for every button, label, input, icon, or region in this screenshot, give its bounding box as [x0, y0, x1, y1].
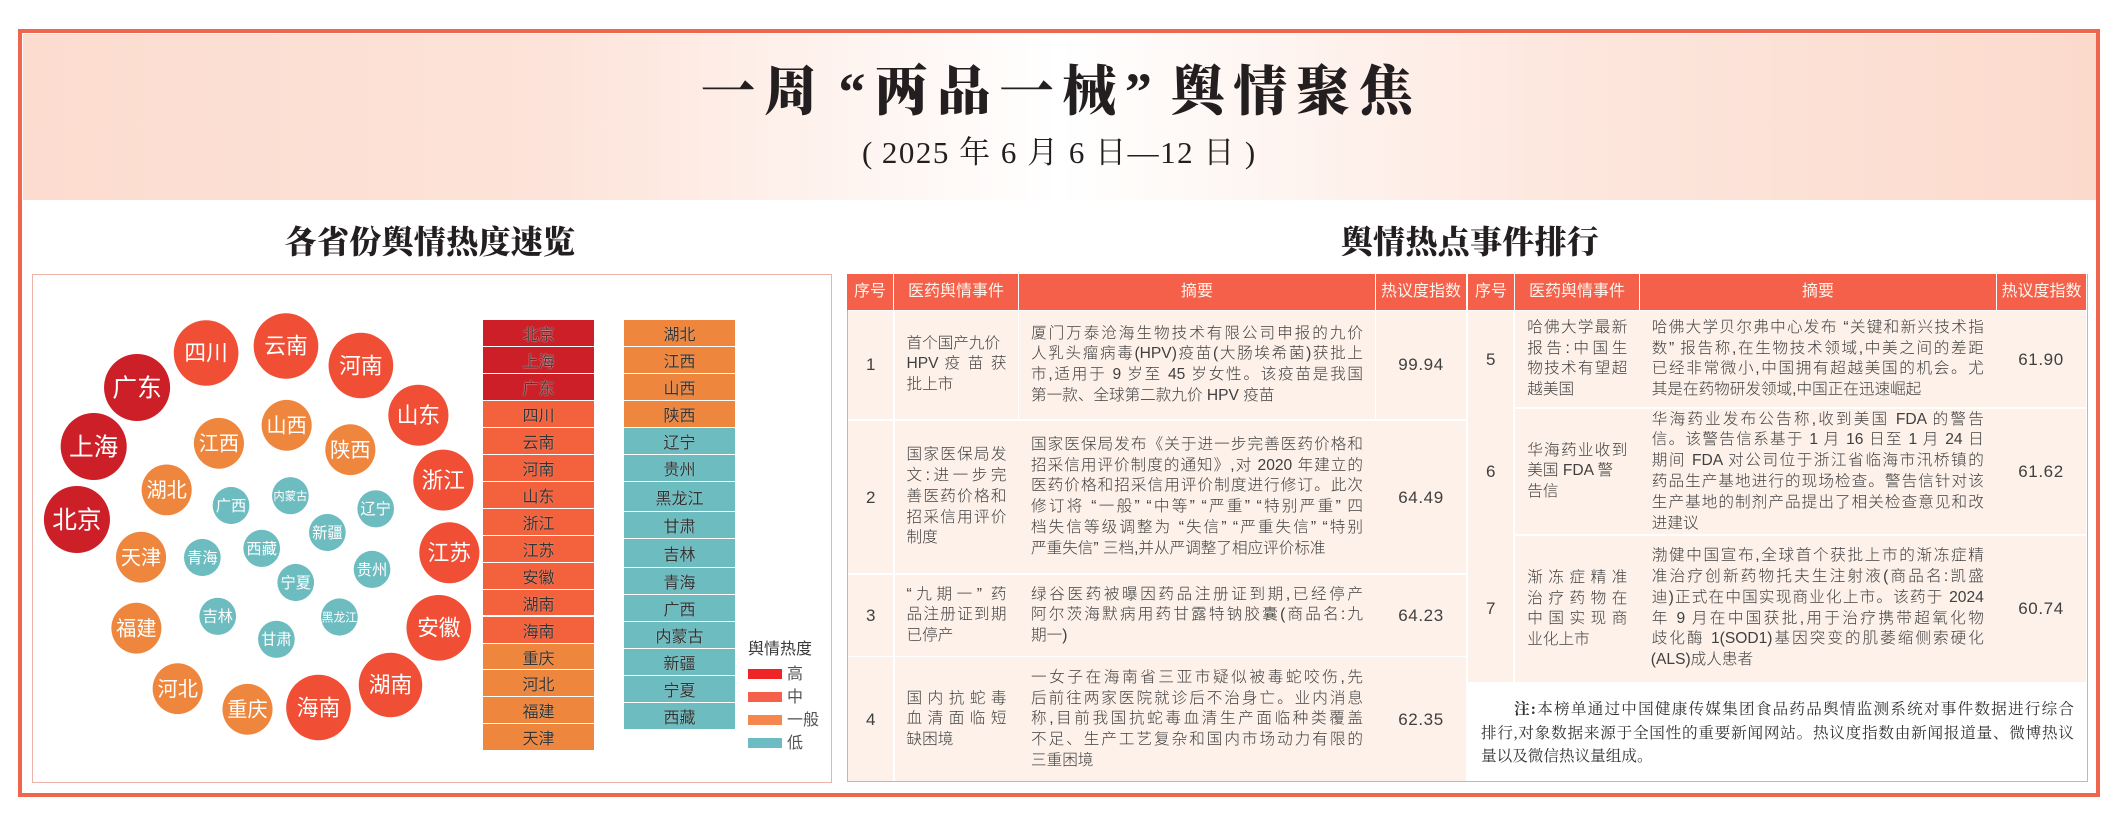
row 2: event: 制度	[906, 529, 938, 546]
row 6: event: 美国 FDA 警	[1527, 462, 1613, 479]
legend: 中	[787, 689, 803, 706]
bubble: 北京	[44, 486, 110, 553]
row 7: summary: 年 9 月在中国获批,用于治疗携带超氧化物	[1652, 610, 1984, 627]
bubble: 海南	[286, 675, 351, 740]
bubble: 山西: 山西	[266, 414, 307, 438]
bubble: 云南: 云南	[264, 333, 308, 359]
row 2: summary: 档失信等级调整为 “失信” “严重失信” “特别	[1031, 519, 1363, 536]
footnote: 注:本榜单通过中国健康传媒集团食品药品舆情监测系统对事件数据进行综合	[1514, 701, 2074, 718]
bubble: 四川	[174, 320, 238, 386]
row 4: summary: 后前往两家医院就诊后不治身亡。业内消息	[1031, 690, 1363, 707]
table header: left: 医药舆情事件	[908, 283, 1004, 300]
row 2: event: 国家医保局发	[906, 446, 1006, 463]
row 7: summary: 迪)正式在中国实现商业化上市。该药于 2024	[1652, 589, 1984, 606]
row 2: summary: 国家医保局发布《关于进一步完善医药价格和	[1031, 436, 1363, 453]
bubble: 黑龙江: 黑龙江	[322, 610, 357, 624]
bubble: 天津	[116, 532, 166, 583]
footnote	[1481, 700, 2074, 765]
bubble: 重庆	[222, 684, 273, 735]
row 5: event: 报告:中国生	[1527, 340, 1627, 357]
row 1: summary: 第一款、全球第二款九价 HPV 疫苗	[1031, 387, 1274, 404]
row 7: event: 渐冻症精准	[1527, 569, 1627, 586]
bubble: 内蒙古	[272, 477, 309, 514]
table header: left: 摘要	[1181, 283, 1213, 300]
row 3: score: 64.23	[1398, 606, 1444, 625]
bubble: 内蒙古: 内蒙古	[273, 489, 307, 503]
legend: 一般	[787, 712, 819, 729]
row 7: summary: 歧化酶 1(SOD1)基因突变的肌萎缩侧索硬化	[1652, 630, 1984, 647]
row 2: summary: 严重失信” 三档,并从严调整了相应评价标准	[1031, 540, 1326, 557]
table header: right: 序号	[1475, 283, 1507, 300]
row 5: event	[1527, 318, 1627, 398]
bubble: 辽宁	[357, 490, 394, 527]
row 7: event: 治疗药物在	[1527, 590, 1627, 607]
province list: column 1: 云南	[522, 435, 554, 452]
province list: column 1	[483, 320, 594, 750]
bubble chart: provinces	[44, 313, 480, 740]
row 6: number: 6	[1486, 462, 1496, 481]
province list: column 2: 新疆	[663, 656, 696, 673]
row 4: score: 62.35	[1398, 710, 1444, 729]
table header: left: 序号	[854, 283, 886, 300]
row 1: summary	[1031, 324, 1363, 404]
row 6: summary	[1652, 410, 1984, 532]
row 2: event: 招采信用评价	[906, 509, 1006, 526]
province list: column 2: 宁夏	[663, 683, 696, 700]
row 4: summary	[1031, 668, 1363, 769]
province list: column 2: 湖北	[663, 327, 696, 344]
row 5: summary: 哈佛大学贝尔弗中心发布 “关键和新兴技术指	[1652, 319, 1984, 336]
bubble: 贵州	[354, 551, 390, 588]
province list: column 1: 四川	[522, 408, 554, 425]
province list: column 1: 江苏	[522, 543, 554, 560]
bubble: 广西	[213, 487, 249, 524]
row 4: summary: 一女子在海南省三亚市疑似被毒蛇咬伤,先	[1031, 669, 1363, 686]
bubble: 陕西: 陕西	[330, 439, 371, 462]
row 2: summary	[1031, 436, 1363, 557]
province list: column 1: 上海	[522, 354, 554, 371]
row 1: summary: 市,适用于 9 岁至 45 岁女性。该疫苗是我国	[1031, 366, 1363, 383]
row 6: summary: 期间 FDA 对公司位于浙江省临海市汛桥镇的	[1652, 452, 1984, 469]
bubble: 云南	[254, 313, 318, 379]
bubble: 四川: 四川	[184, 340, 228, 366]
province list: column 2: 广西	[663, 602, 696, 619]
panel: ranking table frame	[847, 274, 2088, 782]
row 2: summary: 修订将 “一般” “中等” “严重” “特别严重” 四	[1031, 498, 1363, 515]
row 2: score: 64.49	[1398, 488, 1444, 506]
bubble: 广东: 广东	[112, 374, 162, 403]
row 5: event: 物技术有望超	[1527, 360, 1627, 377]
row 6: score: 61.62	[2018, 462, 2064, 481]
bubble: 江苏	[419, 522, 479, 583]
bubble: 重庆: 重庆	[227, 698, 268, 722]
province list: column 1: 河南	[522, 462, 554, 479]
row 6: summary: 药品生产基地进行的现场检查。警告信针对该	[1652, 473, 1984, 490]
table header: right: 医药舆情事件	[1529, 283, 1625, 300]
bubble: 湖南: 湖南	[369, 672, 412, 698]
row 7: summary: 准治疗创新药物托夫生注射液(商品名:凯盛	[1652, 568, 1984, 585]
row 7: event: 业化上市	[1527, 631, 1590, 648]
bubble: 江苏: 江苏	[428, 540, 471, 566]
table header: left	[847, 274, 1465, 310]
row 5: event: 哈佛大学最新	[1527, 319, 1627, 336]
bubble: 福建: 福建	[116, 617, 157, 641]
row 3: event: 已停产	[906, 627, 953, 644]
row 3: event: 品注册证到期	[906, 606, 1006, 623]
row 6: summary: 华海药业发布公告称,收到美国 FDA 的警告	[1652, 411, 1984, 428]
table header: left: 热议度指数	[1381, 283, 1461, 300]
row 4: event: 缺困境	[906, 731, 953, 748]
row 2: summary: 招采信用评价制度的通知》,对 2020 年建立的	[1031, 457, 1363, 474]
row 7: event	[1527, 568, 1627, 648]
bubble: 新疆	[309, 514, 346, 551]
row 5: summary	[1652, 318, 1984, 398]
row 1: event	[906, 335, 1006, 393]
province list: column 1: 河北	[522, 677, 554, 694]
row 1: event: HPV 疫 苗 获	[906, 355, 1006, 372]
row 3: summary: 绿谷医药被曝因药品注册证到期,已经停产	[1031, 586, 1363, 603]
province list: column 1: 山东	[522, 489, 554, 506]
bubble: 西藏: 西藏	[246, 540, 277, 558]
row 3: summary: 期一)	[1031, 627, 1067, 644]
table header: right	[1468, 274, 2086, 310]
bubble: 吉林	[199, 598, 236, 635]
bubble: 河北: 河北	[157, 678, 198, 701]
bubble: 天津: 天津	[121, 546, 161, 570]
row 1: summary: 厦门万泰沧海生物技术有限公司申报的九价	[1031, 325, 1363, 342]
province list: column 2: 甘肃	[663, 519, 696, 536]
row 5: summary: 其是在药物研发领域,中国正在迅速崛起	[1652, 381, 1921, 398]
row 1: event: 批上市	[906, 376, 953, 393]
table body backgrounds: left	[848, 311, 1466, 781]
row 7: number: 7	[1486, 599, 1496, 618]
row 4: event	[906, 690, 1006, 748]
bubble: 浙江: 浙江	[422, 468, 465, 493]
row 5: summary: 已经非常微小,中国拥有超越美国的机会。尤	[1652, 360, 1984, 377]
row 6: event	[1527, 442, 1627, 500]
bubble: 贵州: 贵州	[357, 561, 387, 579]
row 1: score: 99.94	[1398, 355, 1444, 374]
row 7: summary: 渤健中国宣布,全球首个获批上市的渐冻症精	[1652, 547, 1984, 564]
row 7: event: 中国实现商	[1527, 610, 1627, 627]
row 3: event: “九期一” 药	[906, 586, 1006, 603]
bubble: 陕西	[325, 424, 375, 475]
bubble: 青海: 青海	[187, 549, 218, 567]
bubble: 山西	[262, 400, 312, 451]
province list: column 1: 安徽	[522, 570, 554, 587]
row 6: summary: 进建议	[1652, 515, 1699, 532]
province list: column 1: 湖南	[522, 596, 554, 614]
row 7: summary: (ALS)成人患者	[1651, 651, 1753, 668]
legend: 低	[787, 735, 803, 752]
bubble: 北京: 北京	[52, 506, 102, 535]
row 3: summary: 阿尔茨海默病用药甘露特钠胶囊(商品名:九	[1031, 606, 1363, 623]
row 5: number: 5	[1486, 350, 1496, 368]
province list: column 2: 山西	[663, 381, 696, 398]
row 4: summary: 不足、生产工艺复杂和国内市场动力有限的	[1031, 731, 1363, 748]
bubble: 辽宁: 辽宁	[360, 500, 391, 518]
province list: column 2	[624, 320, 735, 729]
bubble: 湖南	[359, 653, 422, 717]
bubble: 宁夏: 宁夏	[280, 574, 311, 592]
row 5: event: 越美国	[1527, 381, 1574, 398]
legend: 舆情热度	[748, 641, 812, 658]
row 3: event	[906, 586, 1006, 644]
bubble: 河南	[329, 333, 393, 398]
province list: column 2: 西藏	[663, 710, 696, 727]
table header: right: 摘要	[1802, 283, 1834, 300]
panel: province heat	[32, 274, 832, 783]
bubble: 河北	[153, 663, 203, 714]
province list: column 2: 黑龙江	[655, 490, 704, 508]
row 6: summary: 信。该警告信系基于 1 月 16 日至 1 月 24 日	[1652, 431, 1984, 448]
row 1: number: 1	[866, 355, 876, 374]
row 4: event: 国内抗蛇毒	[906, 690, 1006, 707]
bubble: 黑龙江	[321, 598, 358, 636]
province list: column 1: 福建	[522, 704, 554, 721]
row 2: summary: 医药价格和招采信用评价制度进行修订。此次	[1031, 477, 1363, 494]
row 2: event	[906, 446, 1006, 546]
bubble: 甘肃	[258, 621, 295, 658]
bubble: 宁夏	[277, 564, 314, 601]
date range: ( 2025 年 6 月 6 日—12 日 )	[862, 135, 1257, 170]
province list: column 1: 海南	[522, 624, 554, 641]
bubble: 安徽: 安徽	[417, 615, 461, 641]
bubble: 山东: 山东	[397, 403, 440, 428]
bubble: 山东	[388, 385, 448, 446]
province list: column 2: 陕西	[663, 408, 696, 425]
row 2: number: 2	[866, 488, 876, 506]
bubble: 广东	[104, 354, 170, 421]
row 4: number: 4	[866, 710, 876, 729]
legend	[748, 640, 819, 752]
province list: column 1: 北京	[522, 327, 554, 344]
row 1: summary: 人乳头瘤病毒(HPV)疫苗(大肠埃希菌)获批上	[1031, 345, 1363, 362]
province list: column 2: 贵州	[663, 462, 696, 479]
bubble: 吉林: 吉林	[202, 608, 233, 626]
bubble: 河南: 河南	[339, 353, 383, 379]
footnote: 排行,对象数据来源于全国性的重要新闻网站。热议度指数由新闻报道量、微博热议	[1481, 724, 2074, 742]
bubble: 新疆: 新疆	[312, 524, 343, 542]
row 2: event: 善医药价格和	[906, 488, 1006, 505]
bubble: 西藏	[243, 530, 280, 567]
row 7: score: 60.74	[2018, 599, 2064, 618]
heading: province heat overview: 各省份舆情热度速览	[285, 224, 575, 260]
row 3: number: 3	[866, 606, 876, 625]
heading: hot event ranking: 舆情热点事件排行	[1341, 224, 1599, 260]
footnote: 量以及微信热议量组成。	[1481, 748, 1653, 765]
bubble: 湖北	[142, 464, 192, 515]
bubble: 上海: 上海	[69, 433, 118, 462]
legend: 高	[787, 666, 803, 683]
row 5: score: 61.90	[2018, 350, 2064, 368]
bubble: 湖北: 湖北	[146, 479, 187, 502]
bubble: 青海	[184, 539, 221, 576]
row 7: summary	[1651, 546, 1984, 668]
table header: right: 热议度指数	[2001, 283, 2082, 300]
row 6: event: 华海药业收到	[1527, 442, 1627, 459]
bubble: 福建	[111, 603, 161, 654]
title: 一周“两品一械”舆情聚焦	[701, 62, 1421, 122]
province list: column 2: 辽宁	[663, 435, 696, 452]
province list: column 1: 天津	[522, 731, 554, 748]
province list: column 2: 江西	[663, 354, 696, 371]
bubble: 江西: 江西	[199, 432, 239, 456]
province list: column 2: 青海	[663, 575, 696, 592]
row 3: summary	[1031, 586, 1363, 644]
province list: column 1: 浙江	[522, 516, 554, 533]
row 5: summary: 数” 报告称,在生物技术领域,中美之间的差距	[1652, 340, 1984, 357]
bubble: 海南: 海南	[297, 695, 340, 721]
bubble: 浙江	[413, 450, 473, 511]
row 6: summary: 生产基地的制剂产品提出了相关检查意见和改	[1652, 494, 1984, 511]
row 4: summary: 称,目前我国抗蛇毒血清生产面临种类覆盖	[1031, 710, 1363, 727]
bubble: 广西: 广西	[216, 497, 246, 515]
header band	[22, 34, 2096, 200]
row 4: event: 血清面临短	[906, 710, 1006, 727]
province list: column 1: 广东	[522, 381, 554, 398]
row 2: event: 文:进一步完	[906, 467, 1006, 484]
row 4: summary: 三重困境	[1031, 752, 1093, 769]
province list: column 1: 重庆	[522, 650, 554, 668]
province list: column 2: 吉林	[663, 547, 696, 564]
bubble: 江西	[194, 418, 244, 469]
province list: column 2: 内蒙古	[655, 629, 704, 646]
bubble: 甘肃: 甘肃	[261, 631, 292, 649]
bubble: 安徽	[406, 595, 471, 661]
bubble: 上海	[61, 413, 127, 480]
row 6: event: 告信	[1527, 483, 1558, 500]
table body backgrounds: right	[1468, 311, 2086, 682]
row 1: event: 首个国产九价	[906, 335, 1000, 352]
